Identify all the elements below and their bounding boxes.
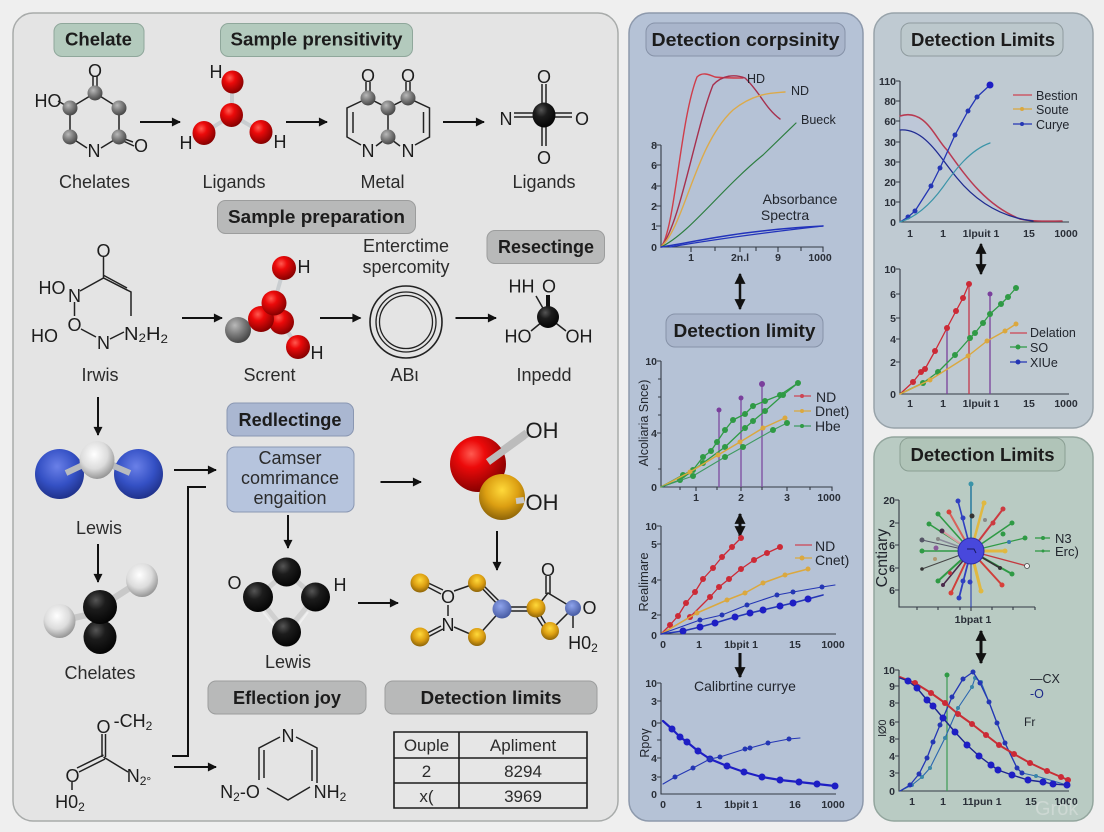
arrow [174,766,216,768]
line chart: peak and decay: 1 [940,796,946,808]
line chart: Realimare: 0 [660,639,666,651]
double arrow [738,514,742,536]
line chart: stems: 1000 [1054,398,1078,410]
label: Irwis: Irwis [82,365,118,385]
molecule: red ligands: H [180,133,192,153]
heading: Resectinge: Resectinge [498,236,594,257]
line chart: crossing curves [879,76,1078,240]
line chart: stems [884,264,1078,410]
molecule: black centre ligands: O [537,67,551,87]
line chart: stems: 1 [940,398,946,410]
molecule: Irwis ring: HO [31,326,58,346]
line chart: stems and series: Hbe [815,418,841,434]
molecule: metal: N [402,141,414,161]
arrow [140,121,180,123]
table: Ouple Apliment: 8294 [504,762,542,781]
line chart: absorbance spectra [651,72,838,264]
line chart: peak and decay: 9 [889,681,895,693]
line chart: peak and decay: 8 [889,698,895,710]
label: Lewis: Lewis [265,652,311,672]
radial chart [874,482,1079,626]
molecule: gold chain: O [441,587,455,607]
molecule: Irwis ring: H [146,324,161,344]
line chart: absorbance spectra: 1 [688,252,694,264]
molecule: Inpedd: HO [504,326,532,346]
line chart: Realimare: 1000 [821,639,845,651]
arrow [738,653,742,677]
molecule: chelate ring: O [134,136,148,156]
line chart: crossing curves: 10 [884,197,896,209]
molecule: red ligands [180,62,286,153]
heading: Sample prensitivity [220,24,412,56]
molecule: CH2 N2 HO2: H0 [55,792,78,812]
heading: Sample prensitivity: Sample prensitivity [230,28,403,50]
line chart: peak and decay: 1 [909,796,915,808]
line chart: peak and decay: 0 [889,786,895,798]
molecule: Irwis ring [31,241,168,353]
molecule: Irwis ring: N [68,286,81,306]
heading: Detection Limits [900,438,1065,471]
line chart: crossing curves: 1 [907,228,913,240]
line chart: crossing curves: 0 [890,217,896,229]
line chart: calibration curve: 1 [696,799,702,811]
double arrow [980,631,982,663]
line chart: Realimare: ND [815,538,835,554]
line chart: Realimare: 0 [651,630,657,642]
label: Inpedd: Inpedd [516,365,572,385]
line chart: absorbance spectra: ND [791,84,809,98]
molecule: Inpedd: O [542,276,556,296]
label: ABI: ABι [390,365,419,385]
line chart: Realimare: 15 [789,639,801,651]
heading: Eflection joy [208,681,366,714]
line chart: stems and series: 4 [651,428,657,440]
molecule: gold chain: H0 [568,633,591,653]
line chart: peak and decay: 11pun 1 [962,796,1002,808]
line chart: crossing curves: 1 [940,228,946,240]
molecule: CH2 N2 HO2: 2 [146,719,153,733]
molecule: red ligands: H [210,62,222,82]
heading: Chelate [54,24,144,56]
line chart: Realimare: 1 [696,639,702,651]
heading: Resectinge [487,230,604,264]
molecule: red gold: OH [526,490,558,515]
line chart: stems: 15 [1023,398,1035,410]
molecule: black diamond: O [227,573,242,593]
heading: Detection Limits: Detection Limits [910,444,1054,465]
line chart: Realimare: 2 [651,610,657,622]
line chart: absorbance spectra: 9 [775,252,781,264]
molecule: CH2 N2 HO2: O [65,766,80,786]
line chart: stems: 5 [890,313,896,325]
line chart: absorbance spectra: Spectra [761,207,809,223]
line chart: absorbance spectra: 4 [651,181,657,193]
molecule: metal: N [362,141,374,161]
heading: Detection limity: Detection limity [674,320,816,341]
heading: Detection Limits [901,23,1063,56]
watermark: Grok [1035,798,1079,820]
line chart: peak and decay: -O [1030,687,1044,701]
molecule: red cluster: H [298,257,310,277]
line chart: crossing curves: 60 [884,116,896,128]
radial chart: 6 [889,540,895,552]
line chart: peak and decay: 1000 [1054,796,1078,808]
line chart: peak and decay: Fr [1024,715,1035,729]
molecule: chelate ring: HO [34,91,62,111]
molecule: CH2 N2 HO2 [55,711,153,814]
molecule: CH2 N2 HO2: N [127,766,140,786]
line chart: peak and decay: 3 [889,768,895,780]
line chart: stems: SO [1030,341,1048,355]
line chart: stems: 1 [907,398,913,410]
heading: Detection Limits: Detection Limits [911,29,1055,50]
line chart: Realimare: 1bpit 1 [724,639,758,651]
molecule: CH2 N2 HO2: 2 [78,800,85,814]
line chart: stems and series: 0 [651,482,657,494]
line chart: crossing curves: Curye [1036,118,1069,132]
arrow [320,317,360,319]
line chart: Realimare: 10 [645,521,657,533]
line chart: absorbance spectra: 8 [651,140,657,152]
box: Camser comrimance engaition: comrimance [241,468,339,488]
line chart: stems: Delation [1030,326,1076,340]
arrow [496,531,498,570]
molecule: gold chain: O [582,598,597,618]
arrow [97,397,99,435]
radial chart: Erc) [1055,544,1079,559]
table: Ouple Apliment: 2 [422,762,431,781]
bracket connector [172,487,206,756]
label: Scrent: Scrent [243,365,296,385]
arrow [287,515,289,548]
heading: Sample preparation [218,200,416,234]
molecule: red gold [450,418,558,520]
molecule: Inpedd [504,276,592,346]
line chart: calibration curve: 0 [651,718,657,730]
radial chart: Ccntiary [874,529,891,587]
molecule: gold chain: N [442,615,454,635]
line chart: stems: 4 [890,334,896,346]
label: Metal: Metal [360,172,405,192]
molecule: black centre ligands: O [575,109,589,129]
line chart: stems: 1lpuit 1 [963,398,1000,410]
line chart: stems: XIUe [1030,356,1058,370]
line chart: stems and series: Dnet) [815,403,849,419]
arrow [174,469,216,471]
table: Ouple Apliment: 3969 [504,787,542,806]
box: Camser comrimance engaition [227,447,354,512]
line chart: peak and decay: lØ0 [877,719,889,737]
molecule: N ring: N [220,782,233,802]
line chart: absorbance spectra: Absorbance [763,191,838,207]
molecule: red cluster: H [310,343,324,363]
molecule: black white [44,563,158,654]
line chart: calibration curve: 16 [789,799,801,811]
molecule: Irwis ring: 2 [161,332,168,346]
line chart: calibration curve [638,678,845,811]
label: Chelates: Chelates [59,172,130,192]
line chart: peak and decay: 6 [889,717,895,729]
line chart: stems and series: 2 [738,492,744,504]
molecule: red ligands: H [274,132,286,152]
line chart: peak and decay: 8 [889,734,895,746]
line chart: absorbance spectra: 2n.l [731,252,749,264]
line chart: calibration curve: 10 [645,678,657,690]
molecule: black centre ligands [500,67,589,168]
line chart: peak and decay: 10 [883,665,895,677]
molecule: Irwis ring: 2 [139,331,146,345]
line chart: calibration curve: 0 [660,799,666,811]
line chart: crossing curves: 20 [884,177,896,189]
line chart: absorbance spectra: 1000 [808,252,832,264]
line chart: absorbance spectra: Bueck [801,113,836,127]
molecule: black centre ligands: N [500,109,512,129]
caption: Enterctime spercomity: spercomity [362,257,450,277]
molecule: metal: O [361,66,375,86]
arrow [182,317,222,319]
heading: Chelate: Chelate [65,28,132,50]
radial chart: 6 [889,563,895,575]
line chart: crossing curves: 15 [1023,228,1035,240]
line chart: absorbance spectra: 1 [651,221,657,233]
table: Ouple Apliment: Apliment [490,736,556,755]
panel: chemistry workflow [13,13,618,821]
line chart: calibration curve: 3 [651,772,657,784]
molecule: black centre ligands: O [537,148,551,168]
label: Ligands: Ligands [202,172,266,192]
panel: detection limits top [874,13,1093,428]
line chart: Realimare: 5 [651,539,657,551]
line chart: calibration curve: Calibrtine currye [694,678,796,694]
line chart: crossing curves: Soute [1036,103,1069,117]
heading: Detection limity [666,314,823,347]
line chart: peak and decay: —CX [1030,672,1061,686]
line chart: stems and series [637,356,849,504]
icon: concentric rings [370,286,442,358]
molecule: N ring [220,726,347,804]
radial chart: 20 [883,495,895,507]
line chart: Realimare: Realimare [636,552,651,612]
molecule: gold chain [410,560,598,655]
molecule: Irwis ring: O [96,241,111,261]
table: Ouple Apliment [394,732,587,808]
line chart: crossing curves: 110 [879,76,896,88]
heading: Eflection joy: Eflection joy [233,687,342,708]
molecule: black diamond [227,558,346,646]
arrow [380,481,421,483]
line chart: stems and series: Alcoliaria Snce) [637,380,651,466]
double arrow [980,244,982,274]
heading: Sample preparation: Sample preparation [228,206,405,227]
line chart: crossing curves: 30 [884,137,896,149]
line chart: absorbance spectra: 2 [651,201,657,213]
molecule: metal [347,66,430,161]
panel: detection sensitivity charts [629,13,863,821]
line chart: stems and series: 3 [784,492,790,504]
table: Ouple Apliment: Ouple [404,736,449,755]
line chart: stems: 2 [890,357,896,369]
line chart: peak and decay [877,665,1078,808]
line chart: crossing curves: 30 [884,157,896,169]
molecule: gold chain: O [541,560,555,580]
molecule: Inpedd: HH [508,276,534,296]
molecule: red gold: OH [526,418,558,443]
heading: Detection limits: Detection limits [420,687,562,708]
line chart: absorbance spectra: 6 [651,160,657,172]
molecule: gold chain: 2 [591,641,598,655]
line chart: stems and series: ND [816,389,836,405]
heading: Detection corpsisinity [646,23,845,56]
line chart: stems: 10 [884,264,896,276]
line chart: crossing curves: 80 [884,96,896,108]
molecule: N ring: N [282,726,294,746]
panel: detection limits bottom [874,437,1093,821]
molecule: N ring: 2 [340,790,347,804]
line chart: crossing curves: Bestion [1036,89,1078,103]
line chart: peak and decay: 15 [1025,796,1037,808]
arrow [97,544,99,582]
molecule: Inpedd: OH [566,326,592,346]
heading: Redlectinge [227,403,354,436]
radial chart: 1bpat 1 [955,614,992,626]
line chart: calibration curve: 1bpit 1 [724,799,758,811]
line chart: crossing curves: 1lpuit 1 [963,228,1000,240]
caption: Enterctime spercomity: Enterctime [363,236,449,256]
radial chart: N3 [1055,531,1072,546]
radial chart: 2 [889,518,895,530]
arrow [456,317,496,319]
molecule: Irwis ring: O [67,315,82,335]
molecule: chelate ring: N [88,141,100,161]
molecule: black diamond: H [334,575,346,595]
arrow [358,602,398,604]
line chart: calibration curve: 3 [651,696,657,708]
heading: Redlectinge: Redlectinge [238,409,342,430]
line chart: crossing curves: 1000 [1054,228,1078,240]
arrow [286,121,327,123]
molecule: chelate ring [34,61,148,161]
line chart: stems and series: 1000 [817,492,841,504]
molecule: CH2 N2 HO2: -CH [114,711,146,731]
label: Chelates: Chelates [64,663,136,683]
molecule: chelate ring: O [88,61,102,81]
line chart: calibration curve: 1000 [821,799,845,811]
line chart: stems and series: 1 [693,492,699,504]
label: Lewis: Lewis [76,518,122,538]
line chart: stems and series: 10 [645,356,657,368]
molecule: Irwis ring: N [97,333,110,353]
line chart: absorbance spectra: 0 [651,242,657,254]
molecule: CH2 N2 HO2: O [96,717,111,737]
box: Camser comrimance engaition: engaition [253,488,327,508]
molecule: N ring: NH [314,782,340,802]
arrow [443,121,484,123]
box: Camser comrimance engaition: Camser [258,448,322,468]
line chart: Realimare: Cnet) [815,552,849,568]
molecule: N ring: 2 [233,790,240,804]
double arrow [739,274,741,309]
molecule: N ring: -O [240,782,260,802]
line chart: calibration curve: 0 [651,789,657,801]
molecule: red cluster [225,256,324,363]
line chart: calibration curve: Rpoγ [638,728,652,758]
line chart: Realimare: 4 [651,575,657,587]
line chart: absorbance spectra: HD [747,72,765,86]
line chart: stems: 0 [890,389,896,401]
molecule: metal: O [401,66,415,86]
line chart: stems: 6 [890,289,896,301]
heading: Detection corpsisinity: Detection corpsinity [652,29,840,50]
table: Ouple Apliment: x( [419,787,434,806]
molecule: blue white blue [35,441,163,499]
line chart: Realimare [636,521,849,651]
heading: Detection limits [385,681,597,714]
line chart: calibration curve: 4 [651,753,657,765]
label: Ligands: Ligands [512,172,576,192]
molecule: Irwis ring: HO [38,278,66,298]
radial chart: 6 [889,585,895,597]
molecule: Irwis ring: N [124,324,137,344]
molecule: CH2 N2 HO2: 2° [140,774,151,788]
line chart: peak and decay: 4 [889,751,895,763]
